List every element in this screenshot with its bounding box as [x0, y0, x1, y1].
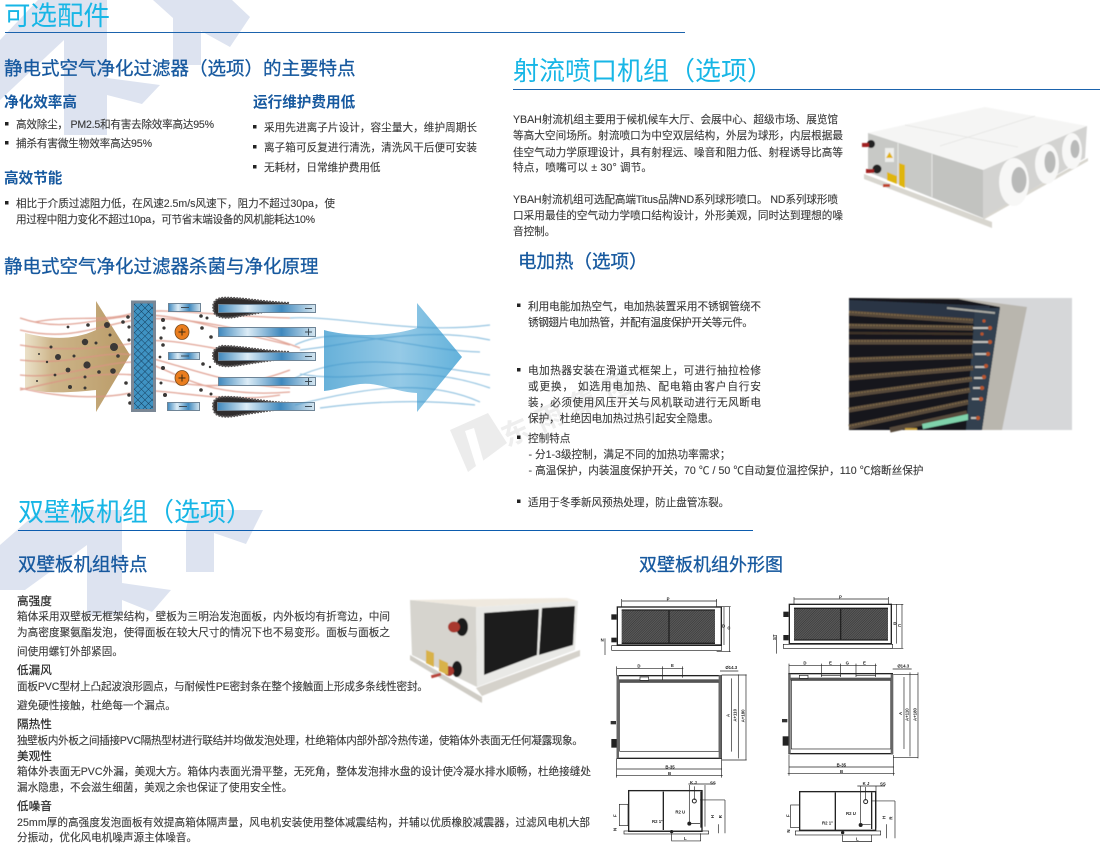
diagram: electrostatic filter principle	[20, 298, 490, 417]
text block: high strength	[17, 594, 390, 658]
text block: jet unit description: 特点，喷嘴可以 ± 30° 调节。	[513, 162, 652, 174]
side view: B-35	[837, 762, 847, 767]
text block: high strength: 高强度	[17, 594, 52, 608]
text block: electric heating bullets: 或更换， 如选用电加热、配电箱由客户自行安	[528, 380, 761, 393]
text block: jet unit description: YBAH射流机组可选配高端Titus品牌ND系列球形喷口。 ND系列球形喷	[513, 193, 838, 206]
text block: low noise	[17, 799, 590, 844]
top view: C	[898, 623, 901, 628]
clean air arrow	[324, 303, 462, 412]
text block: electric heating bullets: 装，必须使用风压开关与风机联动进行无风断电	[528, 396, 761, 409]
text block: jet unit description: 音控制。	[513, 225, 555, 238]
ionizers	[175, 324, 189, 386]
heading: jet unit: 射流喷口机组（选项）	[513, 56, 773, 86]
side view	[782, 661, 918, 776]
filter panel	[132, 302, 154, 410]
side view: A+110	[905, 708, 910, 721]
center logo watermark: 东雨集团	[497, 367, 637, 452]
side view: E	[671, 663, 674, 668]
text block: energy saving: 高效节能	[4, 169, 63, 187]
text block: low noise: 25mm厚的高强度发泡面板有效提高箱体隔声量，风电机安装使用整体减震结构，并辅以优质橡胶减震器，过滤风电机大部	[17, 816, 590, 829]
heading: double-wall unit: 双壁板机组（选项）	[18, 497, 252, 527]
heading: double-wall drawing: 双壁板机组外形图	[639, 555, 783, 575]
text block: low leakage: 避免硬性接触，杜绝每一个漏点。	[17, 699, 176, 712]
side view	[611, 663, 747, 778]
end view: R2 U	[846, 811, 856, 816]
side view: A+110	[733, 708, 738, 722]
top view	[601, 596, 731, 655]
side view: A	[725, 713, 730, 717]
background watermark: lower	[0, 510, 263, 615]
text block: electric heating bullets: 保护，杜绝因电加热过热引起安全隐患。	[528, 412, 719, 425]
side view: E	[863, 661, 866, 666]
text block: low leakage: 面板PVC型材上凸起波浪形圆点，与耐候性PE密封条在整个接触面上形成多条线性密封。	[17, 680, 428, 693]
text block: low noise: 分振动，优化风电机噪声源主体噪音。	[17, 831, 197, 844]
side view: A+180	[913, 708, 918, 721]
heading: electric heating: 电加热（选项）	[518, 251, 648, 272]
end view: L	[684, 836, 687, 841]
text block: high strength: 为高密度聚氨酯发泡，使得面板在较大尺寸的情况下也不易变形。面板与面板之	[17, 626, 390, 639]
side view: A	[898, 711, 903, 715]
text block: low running cost: 采用先进离子片设计，容尘量大，维护周期长	[264, 121, 477, 134]
heading: filter principle: 静电式空气净化过滤器杀菌与净化原理	[4, 256, 319, 277]
text block: insulation: 独壁板内外板之间插接PVC隔热型材进行联结并均做发泡处理，杜绝箱体内部外部冷热传递，使箱体外表面无任何凝露现象。	[17, 734, 583, 747]
text block: high strength: 间使用螺钉外部紧固。	[17, 645, 123, 658]
text block: high purification efficiency: 净化效率高	[4, 93, 77, 111]
text block: energy saving: 相比于介质过滤阻力低，在风速2.5m/s风速下，阻力不超过30pa，使	[16, 197, 335, 210]
top view: C	[727, 626, 730, 631]
top view: D	[722, 624, 725, 629]
side view: A+180	[740, 709, 745, 722]
end view: N	[786, 830, 791, 833]
text block: insulation	[17, 717, 583, 747]
text block: electric heating bullets: - 高温保护，内装温度保护开关，70 ℃ / 50 ℃自动复位温控保护，110 ℃熔断丝保护	[528, 464, 924, 477]
nozzles	[999, 133, 1082, 206]
text block: electric heating bullets	[517, 300, 924, 509]
side view: Ø14.3	[897, 664, 910, 669]
text block: appearance: 箱体外表面无PVC外漏，美观大方。箱体内表面光滑平整，无死角，整体发泡排水盘的设计使冷凝水排水顺畅，杜绝接缝处	[17, 765, 591, 778]
side view: E	[829, 661, 832, 666]
particles	[36, 314, 213, 405]
side view: B	[840, 769, 843, 774]
end view: N	[613, 828, 618, 831]
top view: D	[893, 621, 896, 626]
text block: low running cost: 运行维护费用低	[253, 93, 356, 111]
text block: insulation: 隔热性	[17, 717, 52, 731]
end view	[613, 780, 725, 841]
text block: electric heating bullets: - 分1-3级控制，满足不同的加热功率需求；	[528, 448, 730, 461]
side view: B	[668, 771, 671, 776]
side view: D	[803, 661, 806, 666]
top view: N	[601, 638, 604, 643]
top view: P	[667, 596, 670, 601]
heading: double-wall features: 双壁板机组特点	[18, 554, 148, 575]
text block: appearance: 美观性	[17, 749, 52, 763]
deposits on negative plates	[213, 298, 288, 417]
end view: K J	[863, 781, 870, 786]
text block: high purification efficiency	[4, 93, 215, 150]
end view: H	[881, 816, 886, 819]
drawing: two-fan outline	[601, 596, 747, 841]
text block: energy saving: 用过程中阻力变化不超过10pa，可节省末端设备的风机能耗达10%	[16, 213, 316, 226]
text block: low leakage: 低漏风	[17, 664, 52, 677]
end view	[785, 781, 895, 842]
text block: electric heating bullets: 电加热器安装在滑道式框架上，可进行抽拉检修	[528, 364, 761, 377]
title: optional accessories: 可选配件	[4, 1, 110, 31]
text block: high purification efficiency: 捕杀有害微生物效率高达95%	[16, 137, 153, 150]
end view: R2 1"	[822, 821, 833, 826]
top view: ST	[772, 634, 777, 640]
heading: filter features: 静电式空气净化过滤器（选项）的主要特点	[4, 58, 356, 79]
end view: F	[785, 814, 790, 817]
side view: Ø14.3	[725, 665, 738, 670]
text block: high strength: 箱体采用双壁板无框架结构，壁板为三明治发泡面板，内外板均有折弯边，中间	[17, 610, 390, 623]
end view: R	[889, 816, 894, 820]
text block: low noise: 低噪音	[17, 799, 52, 813]
text block: electric heating bullets: 锈钢翅片电加热管，并配有温度保护开关等元件。	[528, 316, 753, 329]
end view: R	[718, 814, 723, 818]
text block: electric heating bullets: 适用于冬季新风预热处理，防止盘管冻裂。	[528, 496, 729, 509]
end view: F	[613, 814, 618, 817]
end view: R2 1"	[652, 819, 663, 824]
text block: jet unit description: 等高大空间场所。射流喷口为中空双层结构，外层为球形，内层根据最	[513, 129, 843, 142]
end view: SS	[710, 780, 716, 785]
side view: G	[846, 661, 850, 666]
top view: P	[839, 594, 842, 599]
photo: double-wall unit	[410, 598, 580, 703]
text block: electric heating bullets: 控制特点	[528, 432, 571, 445]
end view: SS	[880, 781, 886, 786]
text block: jet unit description: YBAH射流机组主要用于候机候车大厅、会展中心、超级市场、展览馆	[513, 113, 838, 126]
side view: B-35	[665, 764, 675, 769]
dirty air arrow	[25, 301, 130, 412]
end view: H	[710, 815, 715, 818]
text block: low running cost: 无耗材，日常维护费用低	[264, 161, 381, 174]
background watermark: upper	[0, 0, 250, 135]
end view: K J	[690, 780, 697, 785]
text block: low running cost	[253, 93, 477, 174]
text block: high purification efficiency: 高效除尘， PM2.5和有害去除效率高达95%	[16, 118, 215, 131]
text block: electric heating bullets: 利用电能加热空气，电加热装置采用不锈钢管绕不	[528, 300, 761, 313]
text block: appearance	[17, 749, 591, 794]
plates	[168, 304, 316, 410]
text block: low leakage	[17, 664, 428, 712]
end view: R2 U	[675, 809, 685, 814]
top view	[772, 594, 903, 654]
side view: D	[637, 664, 640, 669]
center logo watermark	[450, 367, 637, 472]
text block: jet unit description: 佳空气动力学原理设计，具有射程远、噪音和阻力低、射程诱导比高等	[513, 146, 843, 159]
photo: jet unit	[862, 107, 1088, 228]
text block: jet unit description: 口采用最佳的空气动力学喷口结构设计，外形美观，同时达到理想的噪	[513, 209, 843, 222]
text block: energy saving	[4, 169, 335, 226]
text block: appearance: 漏水隐患，不会滋生细菌，美观之余也保证了使用安全性。	[17, 781, 292, 794]
text block: jet unit description	[513, 113, 843, 238]
photo: electric heater	[849, 298, 1072, 430]
end view: L	[856, 837, 859, 842]
drawing: three-fan outline	[772, 594, 918, 842]
text block: low running cost: 离子箱可反复进行清洗，清洗风干后便可安装	[264, 141, 477, 154]
